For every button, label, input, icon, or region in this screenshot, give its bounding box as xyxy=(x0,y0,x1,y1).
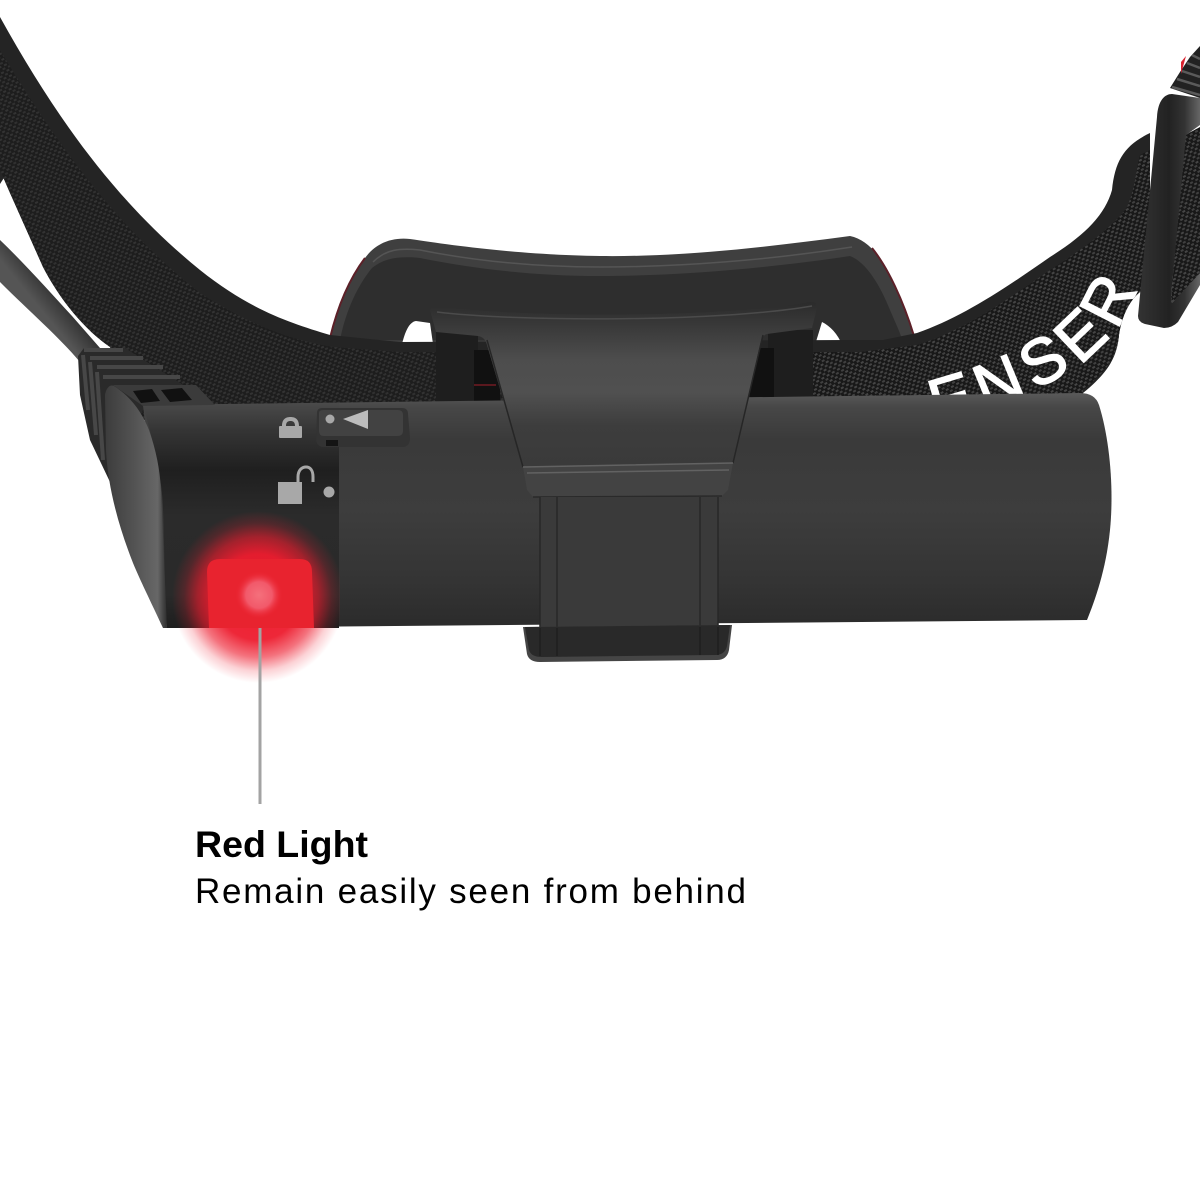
lower bracket foot xyxy=(523,625,732,662)
headlamp product illustration xyxy=(0,17,1200,804)
description: Remain easily seen from behind xyxy=(195,872,746,911)
lamp body dark left section xyxy=(150,428,339,628)
red light hot spot xyxy=(235,571,283,619)
icon: locked padlock xyxy=(279,417,302,438)
lamp body right section xyxy=(143,393,1112,628)
lower bracket strap xyxy=(540,497,718,629)
callout leader line xyxy=(258,628,262,804)
vent slots and top edge xyxy=(113,385,215,406)
lamp end cap xyxy=(105,385,167,628)
rear pad xyxy=(330,236,915,350)
strap lettering: ENSER xyxy=(928,277,1138,395)
red light window xyxy=(207,559,314,628)
right strap buckle xyxy=(1138,94,1200,328)
lock switch xyxy=(316,408,410,447)
infographic canvas xyxy=(0,17,1200,910)
icon: switch arrow xyxy=(343,410,368,429)
left buckle edge xyxy=(0,108,10,184)
clip posts behind bracket xyxy=(436,330,813,402)
red light glow xyxy=(165,505,340,690)
head strap xyxy=(0,17,1150,420)
icon: unlocked padlock xyxy=(278,467,313,504)
bracket lip xyxy=(523,463,733,497)
icon: unlock dot xyxy=(324,486,334,498)
icon: switch dot xyxy=(326,414,334,424)
right rear ribbed cable xyxy=(1170,46,1200,98)
left cable ribs xyxy=(78,348,215,482)
callout text xyxy=(195,824,746,911)
mounting bracket xyxy=(430,302,817,467)
heading: Red Light xyxy=(195,824,368,865)
power cable xyxy=(0,240,100,362)
